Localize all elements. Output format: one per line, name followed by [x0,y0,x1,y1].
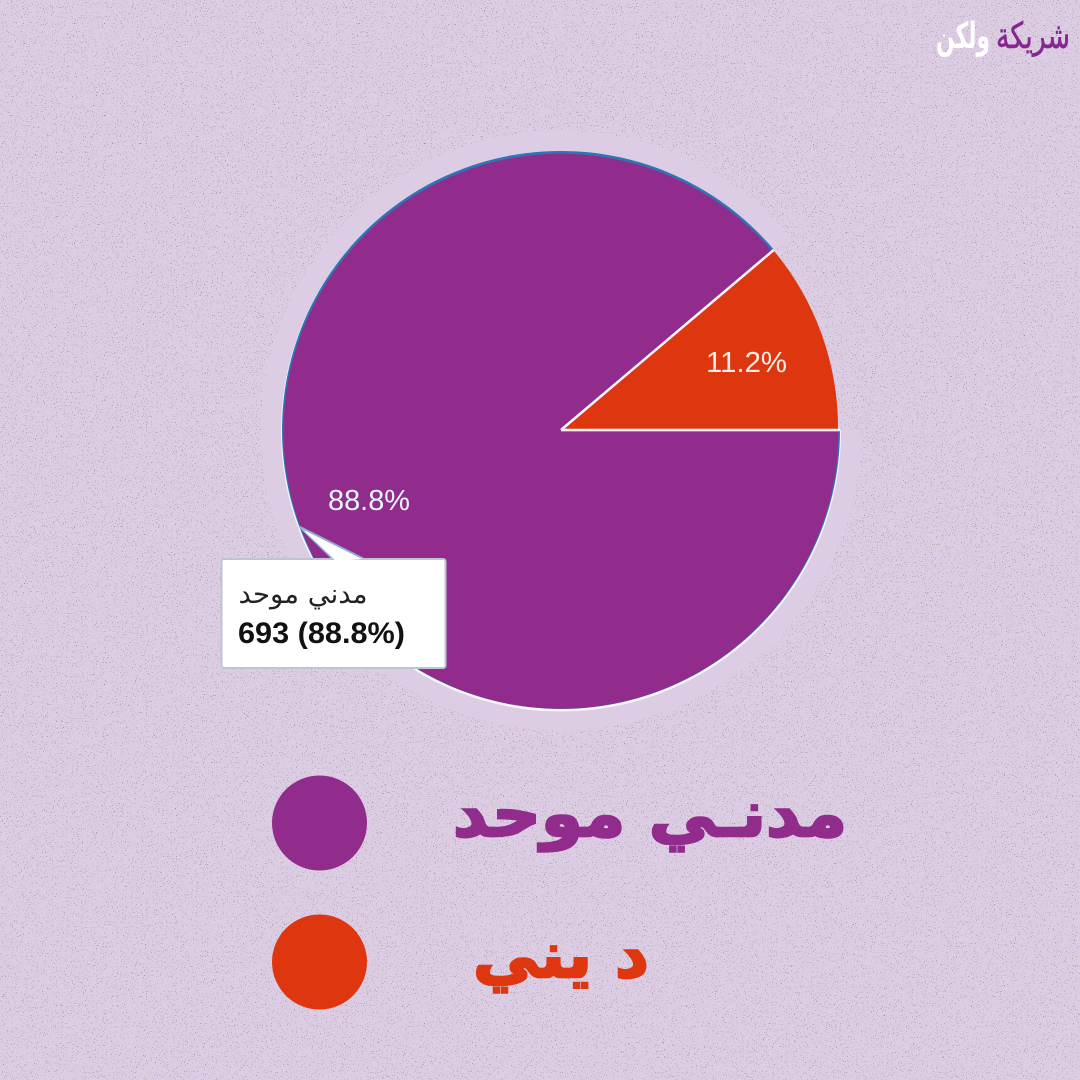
logo [936,16,1070,57]
logo word: white: ولكن [936,16,990,57]
legend dot: red [272,914,367,1010]
label: 88.8 percent: 88.8% [328,485,410,517]
legend label: red: د يني [473,919,649,993]
pie chart [261,131,861,731]
tooltip [222,527,446,668]
label: 11.2 percent: 11.2% [706,347,787,379]
legend dot: purple [272,776,367,870]
legend label: purple: مدنـي موحد [453,778,847,852]
tooltip value: 693 (88.8%) [238,617,405,650]
tooltip box [222,559,446,668]
slice outline: blue edge [282,151,840,709]
slice fill: purple [284,154,838,709]
slice: 11.2 percent [561,250,838,430]
tooltip category: مدني موحد [238,579,368,610]
tooltip pointer [300,527,364,560]
pointer join [303,530,362,561]
pale halo ring behind the purple slice [261,131,861,731]
radial dividers [561,250,840,430]
slice: 88.8 percent [281,152,841,712]
legend [272,776,847,1010]
